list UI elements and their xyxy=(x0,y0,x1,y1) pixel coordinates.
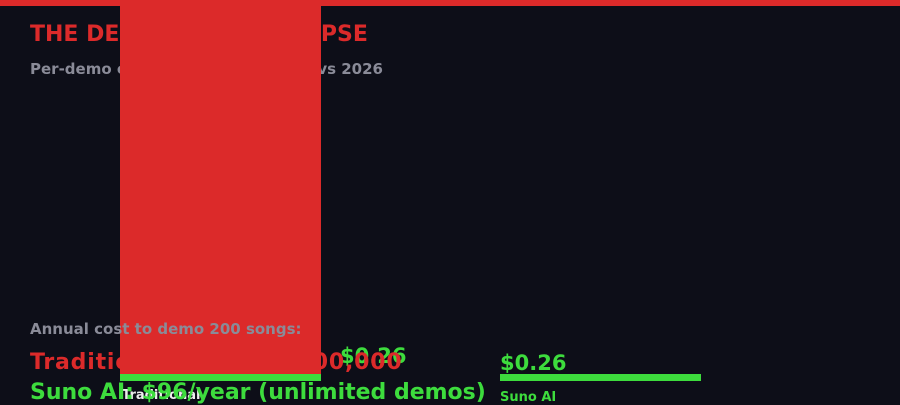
subtitle: Per-demo cost: Traditional studio vs 2026 xyxy=(30,60,383,78)
bar: suno xyxy=(500,374,701,381)
bar: traditional xyxy=(120,6,321,374)
bar baseline: traditional xyxy=(120,374,321,381)
top accent bar xyxy=(0,0,900,6)
title: THE DEMO COST COLLAPSE xyxy=(30,22,368,47)
suno annual cost: Suno AI: $96/year (unlimited demos) xyxy=(30,380,486,405)
annual cost caption: Annual cost to demo 200 songs: xyxy=(30,320,302,338)
value: suno: $0.26 xyxy=(500,351,566,375)
label: suno: Suno AI xyxy=(500,390,556,405)
label: traditional: Traditional xyxy=(122,388,200,403)
traditional annual cost: Traditional studio: $100,000 xyxy=(30,350,402,375)
value: traditional: $0.26 xyxy=(340,344,406,368)
